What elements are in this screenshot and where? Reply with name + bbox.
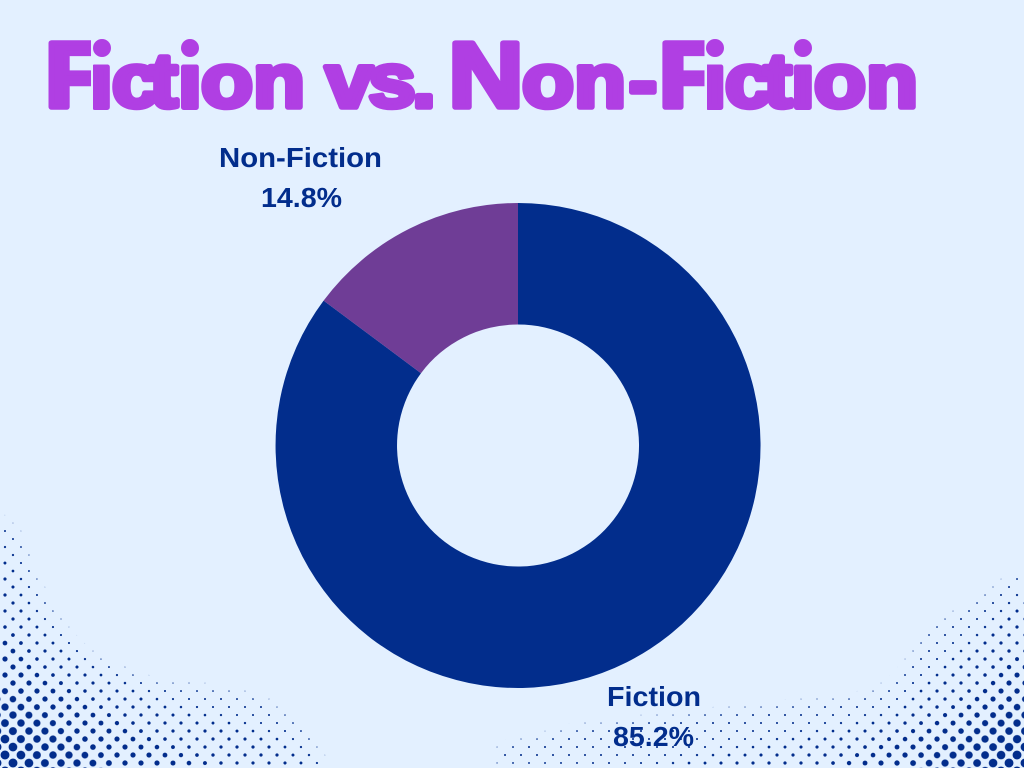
donut chart <box>276 203 761 688</box>
segment: fiction 85.2% <box>276 203 761 688</box>
label: non-fiction <box>219 142 382 213</box>
halftone dots: bottom right corner <box>496 578 1024 768</box>
halftone dots: bottom left corner <box>0 514 326 768</box>
title: Fiction vs. Non-Fiction <box>45 23 918 127</box>
segment: non-fiction 14.8% <box>324 203 518 373</box>
label: non-fiction: Non-Fiction <box>219 142 382 173</box>
title letter gaps and i-dots <box>91 32 812 114</box>
label: fiction <box>607 681 701 752</box>
label: fiction: 85.2% <box>613 721 694 752</box>
label: non-fiction: 14.8% <box>261 182 342 213</box>
label: fiction: Fiction <box>607 681 701 712</box>
